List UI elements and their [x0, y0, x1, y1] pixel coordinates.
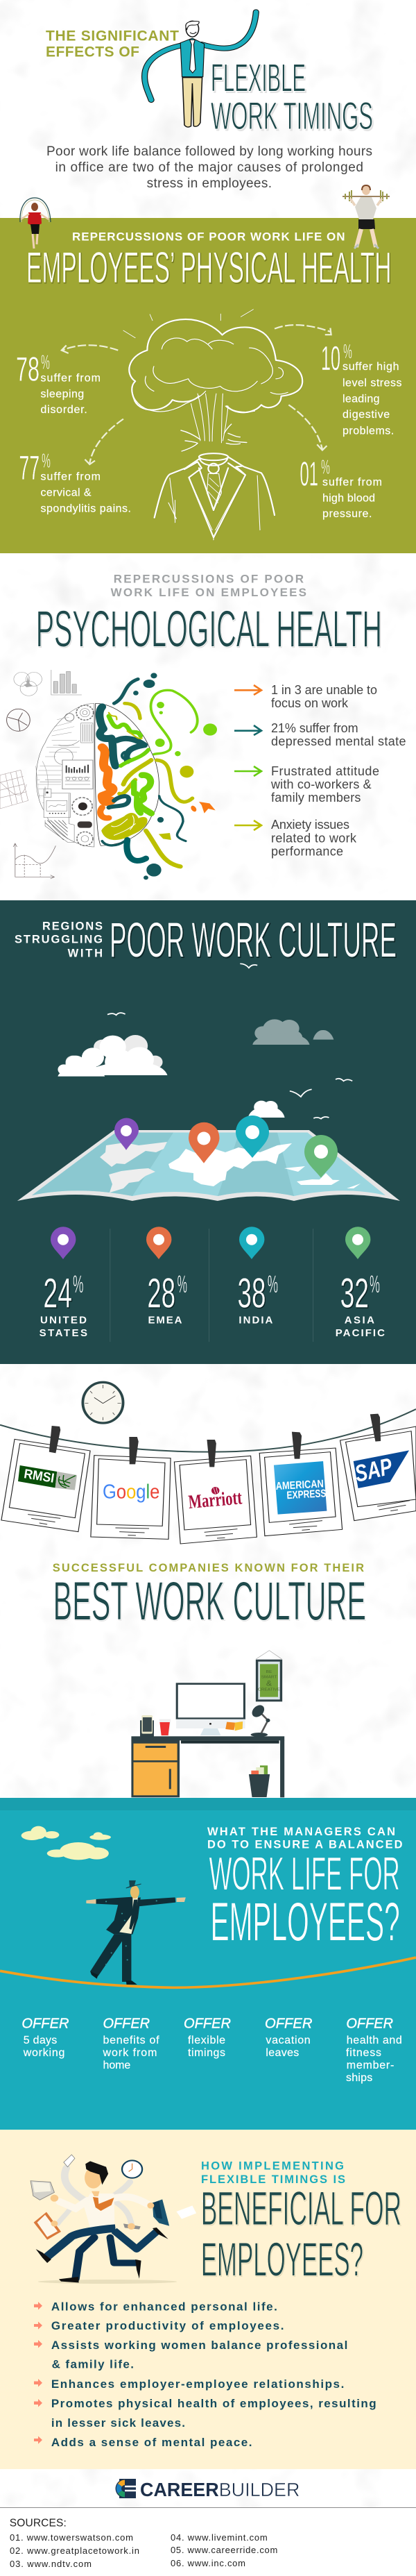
- heading: regions struggling with: [15, 920, 103, 959]
- stat: 10%: digestive: [343, 409, 390, 421]
- offer: 5 days working: 5 days: [24, 2035, 57, 2046]
- stat: 01%: 01: [300, 455, 318, 493]
- stat: united states: STATES: [40, 1327, 87, 1339]
- item: frustrated: Frustrated attitude: [271, 764, 379, 778]
- stat: 01%: suffer from: [322, 476, 383, 488]
- stat: asia pacific: 32: [340, 1270, 369, 1316]
- panel: what managers can do: [0, 1798, 416, 2130]
- logo wordmark: CAREERBUILDER: [140, 2479, 300, 2500]
- offer: health and fitness memberships: health and: [347, 2035, 402, 2046]
- header section: [46, 12, 373, 191]
- right half: colourful brain: [95, 679, 198, 866]
- stat: united states: 24: [43, 1270, 72, 1316]
- sources column two: 06. www.inc.com: [171, 2558, 245, 2568]
- benefit items: Allows for enhanced personal life.: [51, 2300, 277, 2313]
- sources column one: 03. www.ndtv.com: [10, 2559, 92, 2569]
- offer: vacation leaves: OFFER: [265, 2017, 312, 2032]
- stat: 10%: %: [343, 341, 352, 363]
- heading: regions struggling with: STRUGGLING: [15, 933, 103, 945]
- illustration: clouds: [58, 1019, 333, 1118]
- icon: man lifting barbell: [343, 185, 390, 249]
- stat: 01%: %: [321, 457, 330, 479]
- map pin: teal: [236, 1116, 269, 1158]
- item: anxiety: performance: [271, 844, 343, 858]
- list: psychological effects: [234, 683, 406, 858]
- benefit items: Adds a sense of mental peace.: [51, 2436, 252, 2449]
- poster: [256, 1651, 282, 1701]
- benefit items: Greater productivity of employees.: [51, 2319, 284, 2332]
- stat: 77%: %: [42, 451, 51, 473]
- offer: vacation leaves: leaves: [266, 2047, 299, 2059]
- item: depressed: depressed mental state: [271, 734, 406, 748]
- stat: 78%: disorder.: [40, 404, 87, 416]
- polaroid: rmsi: [1, 1439, 90, 1532]
- arrow: olive: [234, 820, 261, 830]
- benefit items: Assists working women balance professional: [51, 2339, 347, 2352]
- panel: benefits of flexible timings: [0, 2130, 416, 2469]
- region dividers: [110, 1229, 313, 1342]
- stat: 10%: suffer high: [343, 361, 399, 373]
- stat: 78%: sleeping: [40, 389, 85, 400]
- list: benefits: [34, 2300, 376, 2449]
- offer: flexible timings: flexible: [188, 2035, 225, 2046]
- panel: regions struggling with poor work culture: %: [177, 1271, 187, 1298]
- offer: vacation leaves: [265, 2017, 312, 2059]
- stat: india: INDIA: [239, 1315, 273, 1327]
- heading: repercussions of poor work life on: REPERCUSSIONS OF POOR WORK LIFE ON: [72, 230, 345, 243]
- illustration: tightrope: [0, 1958, 416, 1987]
- offer: health and fitness memberships: member-: [347, 2060, 394, 2071]
- benefit items: [51, 2300, 376, 2449]
- map pin: green: [304, 1135, 338, 1178]
- stat: 78%: suffer from: [40, 372, 101, 384]
- heading: how implementing flexible timings is: [201, 2160, 345, 2186]
- logo text: american express: [275, 1478, 327, 1502]
- heading: repercussions of poor work life on employees: REPERCUSSIONS OF POOR: [114, 572, 304, 585]
- illustration: folded world map: [17, 1130, 400, 1201]
- sources heading: SOURCES:: [10, 2517, 67, 2529]
- arrow: orange: [234, 685, 261, 695]
- stat: 10%: leading: [343, 394, 380, 405]
- offer: flexible timings: OFFER: [184, 2017, 231, 2032]
- offer: 5 days working: working: [23, 2047, 64, 2059]
- logo text: american express: AMERICAN: [275, 1478, 324, 1492]
- illustration: brain, mechanical and colourful halves: [36, 673, 217, 879]
- heading: regions struggling with: WITH: [68, 947, 103, 959]
- item: frustrated: [270, 764, 379, 805]
- stat: 10%: [321, 340, 402, 437]
- offer: benefits of work from home: [103, 2017, 159, 2071]
- continents: [100, 1142, 167, 1193]
- offer: health and fitness memberships: ships: [346, 2072, 372, 2084]
- offer: vacation leaves: vacation: [266, 2035, 311, 2046]
- stat: 77%: suffer from: [40, 471, 101, 482]
- illustration: office desk: [131, 1651, 284, 1797]
- item: frustrated: family members: [271, 791, 361, 805]
- map pin: orange: [189, 1122, 219, 1163]
- icon: woman skipping rope: [20, 198, 51, 249]
- stat: 10%: 10: [321, 340, 340, 378]
- clothesline: [0, 1409, 416, 1452]
- icon: venn diagram: [14, 672, 42, 696]
- polaroid: google: [91, 1456, 171, 1539]
- heading: work life for employees: [209, 1849, 400, 1953]
- polaroid: marriott: [174, 1456, 257, 1544]
- heading: regions struggling with: REGIONS: [42, 920, 103, 932]
- arrow: to 01%: [288, 405, 327, 451]
- clothes pegs: [49, 1414, 381, 1467]
- stat: asia pacific: [336, 1227, 385, 1339]
- stat: 78%: %: [41, 351, 50, 373]
- item: anxiety: related to work: [271, 831, 357, 845]
- intro paragraph: stress in employees.: [147, 176, 272, 191]
- logo text: rmsi: RMSI: [23, 1467, 55, 1486]
- logo text: sap: SAP: [352, 1454, 395, 1488]
- heading: how implementing flexible timings is: HOW IMPLEMENTING: [201, 2160, 344, 2173]
- item: depressed: 21% suffer from: [271, 721, 358, 735]
- stat: 77%: cervical &: [40, 487, 92, 498]
- waste bin: [249, 1765, 270, 1797]
- cup: [159, 1719, 171, 1736]
- sources column two: 05. www.careerride.com: [171, 2545, 277, 2555]
- stat: emea: 28: [147, 1270, 175, 1316]
- sources column two: [171, 2532, 277, 2568]
- offer: benefits of work from home: home: [103, 2060, 130, 2071]
- logo text: marriott: Marriott: [187, 1487, 243, 1513]
- panel: employees' physical health: [0, 185, 416, 553]
- offer: 5 days working: [21, 2017, 69, 2059]
- title: flexible work timings: FLEXIBLE: [211, 56, 306, 101]
- stat: asia pacific: PACIFIC: [336, 1327, 385, 1339]
- sticky notes: [225, 1721, 243, 1731]
- stat: 10%: problems.: [343, 425, 395, 437]
- item: anxiety: [271, 818, 357, 858]
- stat: 77%: 77: [19, 449, 40, 487]
- poster: CREATIVE: [258, 1687, 280, 1692]
- poster: SMART: [261, 1675, 277, 1679]
- item: focus: 1 in 3 are unable to: [271, 683, 377, 697]
- polaroid: sap: [340, 1426, 416, 1521]
- stat: united states: UNITED: [40, 1315, 87, 1327]
- title: flexible work timings: [211, 56, 373, 137]
- heading: successful companies known for their: SUCCESSFUL COMPANIES KNOWN FOR THEIR: [53, 1562, 364, 1574]
- arrow: to 10%: [275, 325, 331, 335]
- arrow: green: [234, 766, 261, 776]
- offer: health and fitness memberships: fitness: [346, 2047, 381, 2059]
- panel: regions struggling with poor work culture: %: [268, 1271, 278, 1298]
- benefit items: in lesser sick leaves.: [51, 2416, 185, 2430]
- item: focus: [271, 683, 377, 710]
- stat: 77%: [19, 449, 132, 515]
- icon: bar chart: [51, 670, 82, 695]
- stat: united states: %: [73, 1271, 83, 1298]
- stat: 01%: [300, 455, 383, 520]
- desk: [131, 1736, 284, 1797]
- offer: health and fitness memberships: [346, 2017, 402, 2084]
- sources column one: 01. www.towerswatson.com: [10, 2532, 133, 2543]
- offer: benefits of work from home: benefits of: [103, 2035, 159, 2046]
- illustration: clouds: [21, 1826, 111, 1860]
- stat: india: 38: [237, 1270, 266, 1316]
- offer: flexible timings: [184, 2017, 231, 2059]
- intro paragraph: Poor work life balance followed by long working hours: [46, 144, 372, 159]
- stat: asia pacific: ASIA: [345, 1315, 374, 1327]
- stat: 10%: level stress: [343, 377, 402, 389]
- heading: how implementing flexible timings is: FLEXIBLE TIMINGS IS: [201, 2173, 345, 2186]
- poster: &: [266, 1680, 272, 1687]
- heading: repercussions of poor work life on employees: WORK LIFE ON EMPLOYEES: [111, 586, 306, 599]
- map pin: purple: [114, 1118, 139, 1150]
- bullet icons: [34, 2302, 42, 2444]
- heading: repercussions of poor work life on employees: [111, 572, 306, 599]
- sources: [10, 2517, 277, 2569]
- stat: 01%: pressure.: [322, 508, 372, 520]
- section: companies with best work culture: [0, 1382, 416, 1797]
- illustration: multitasking businessman: [31, 2155, 214, 2284]
- illustration: birds: [107, 963, 352, 1119]
- stat: asia pacific: %: [370, 1271, 380, 1298]
- sources column two: 04. www.livemint.com: [171, 2532, 268, 2543]
- polaroid: american express: [259, 1448, 343, 1536]
- illustration: businessman on tightrope: [86, 1880, 186, 1985]
- intro paragraph: in office are two of the major causes of prolonged: [55, 160, 363, 175]
- heading: what the managers can do: [207, 1826, 403, 1851]
- icon: cartoon businessman: [145, 12, 256, 127]
- monitor: [176, 1684, 245, 1735]
- icon: wall clock: [83, 1382, 123, 1423]
- benefit items: Enhances employer-employee relationships.: [51, 2377, 344, 2391]
- benefit items: & family life.: [52, 2358, 134, 2371]
- poster: BE: [266, 1669, 272, 1674]
- left half: mechanical brain: [36, 703, 94, 847]
- arrow: teal: [234, 725, 261, 735]
- logo: careerbuilder: [115, 2479, 300, 2500]
- section: psychological health: [0, 572, 406, 879]
- sources column one: 02. www.greatplacetowork.in: [10, 2545, 139, 2556]
- logo icon: [115, 2479, 136, 2498]
- item: anxiety: Anxiety issues: [271, 818, 349, 832]
- icon: grid graph: [0, 770, 28, 809]
- sources column one: [10, 2532, 139, 2569]
- item: focus: focus on work: [271, 696, 349, 710]
- benefit items: Promotes physical health of employees, resulting: [51, 2397, 376, 2410]
- offer: 5 days working: OFFER: [21, 2017, 69, 2032]
- title: the significant effects of: THE SIGNIFICANT: [46, 28, 179, 44]
- title: the significant effects of: [46, 28, 179, 60]
- illustration: exploding head in a suit: [123, 310, 302, 540]
- stat: 77%: spondylitis pains.: [40, 503, 132, 515]
- offer: benefits of work from home: OFFER: [103, 2017, 150, 2032]
- stat: emea: EMEA: [148, 1315, 182, 1327]
- heading: beneficial for employees: [201, 2182, 401, 2286]
- arrow: to 77%: [85, 419, 123, 464]
- offer: health and fitness memberships: OFFER: [346, 2017, 393, 2032]
- phone: [140, 1715, 154, 1737]
- stat: 01%: high blood: [322, 493, 376, 504]
- title: the significant effects of: EFFECTS OF: [46, 44, 139, 60]
- heading: what the managers can do: DO TO ENSURE A BALANCED: [207, 1839, 403, 1851]
- stat: india: [237, 1227, 278, 1327]
- logo text: american express: EXPRESS: [286, 1488, 327, 1501]
- item: depressed: [271, 721, 406, 748]
- stat: emea: [146, 1227, 187, 1327]
- stat: united states: [40, 1227, 87, 1339]
- stat: 78%: [16, 351, 101, 416]
- panel: regions struggling with poor work culture: [0, 900, 416, 1364]
- stat: 78%: 78: [16, 351, 40, 389]
- lamp: [250, 1703, 270, 1737]
- icon: pie chart: [7, 709, 30, 731]
- offer: flexible timings: timings: [188, 2047, 225, 2059]
- paint splatters: [133, 673, 217, 879]
- item: frustrated: with co-workers &: [270, 777, 372, 791]
- heading: what the managers can do: WHAT THE MANAGERS CAN: [207, 1826, 395, 1838]
- offer: benefits of work from home: work from: [103, 2047, 157, 2059]
- arrow: to 78%: [62, 345, 118, 353]
- icon: function curve graph: [13, 843, 55, 879]
- logo text: google: Google: [103, 1481, 159, 1503]
- intro paragraph: [46, 144, 372, 191]
